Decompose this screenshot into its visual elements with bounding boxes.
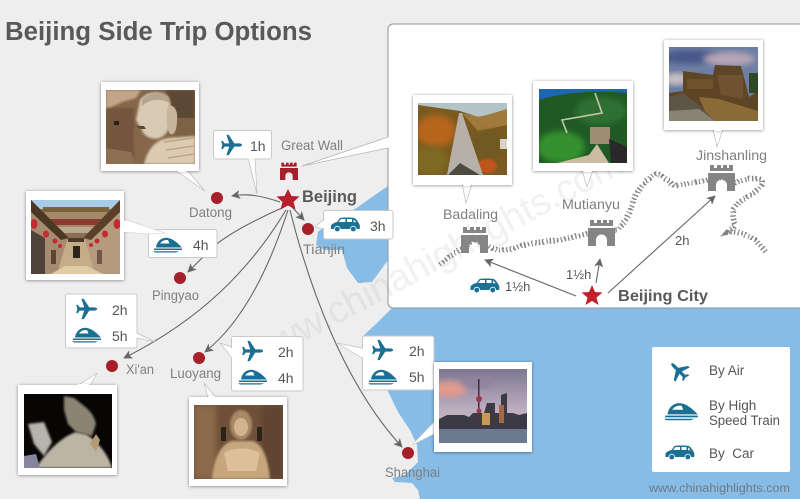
info box: flight to Datong 1h: [214, 130, 272, 194]
panel: Great Wall inset: [388, 24, 800, 308]
time: train: 5h: [409, 369, 425, 385]
label: Tianjin: Tianjin: [303, 242, 345, 257]
label: By High Speed Train: By High: [709, 398, 756, 413]
photo card: Shanghai skyline: [412, 362, 532, 452]
icon: plane: [221, 135, 242, 155]
icon: train: [238, 370, 267, 384]
arrow: city to Mutianyu: [596, 259, 600, 283]
time: train: 5h: [112, 328, 128, 344]
icon: car: [470, 278, 499, 292]
route arrows from Beijing: [124, 195, 402, 447]
icon: train: [153, 238, 182, 252]
arrow: Pingyao: [188, 207, 284, 272]
icon: Badaling tower: [461, 227, 488, 253]
photo card: Datong Yungang Buddha: [101, 82, 205, 191]
arrow: Shanghai: [290, 210, 402, 447]
title: Beijing Side Trip Options: [5, 18, 312, 46]
dot: Datong: [211, 192, 223, 204]
legend: [652, 347, 790, 472]
photo card: Pingyao courtyard: [26, 191, 165, 280]
info box: Luoyang 2h flight, 4h train: [220, 336, 303, 391]
icon: train: [72, 328, 101, 342]
website credit: www.chinahighlights.com: [648, 483, 790, 495]
label: Pingyao: Pingyao: [152, 288, 199, 303]
label: Jinshanling: Jinshanling: [696, 148, 767, 163]
icon: by car: [666, 445, 694, 459]
dot: Pingyao: [174, 272, 186, 284]
callout wedge: Great Wall to panel: [302, 137, 389, 166]
arrow: city to Jinshanling: [608, 196, 715, 293]
label: By Air: By Air: [709, 363, 745, 378]
info box: train to Pingyao 4h: [148, 230, 217, 258]
dot: Luoyang: [193, 352, 205, 364]
icon: Great Wall gate: [280, 163, 298, 180]
icon: train: [368, 370, 397, 384]
icon: Jinshanling tower: [708, 165, 735, 191]
icon: Beijing City star: [582, 285, 602, 305]
dot: Tianjin: [302, 223, 314, 235]
icon: plane: [372, 340, 393, 360]
photo card: Mutianyu: [533, 81, 633, 187]
info box: Shanghai 2h flight, 5h train: [337, 336, 434, 390]
photo card: Luoyang Longmen Buddha: [189, 383, 287, 486]
icon: plane: [76, 299, 97, 319]
marker: Beijing star: [276, 189, 300, 210]
label: Badaling: Badaling: [443, 207, 498, 222]
time: to Mutianyu: 1½h: [566, 267, 591, 282]
arrow: Xi'an: [124, 210, 286, 358]
icon: by train: [664, 403, 698, 420]
icon: plane: [242, 341, 263, 361]
time: flight: 2h: [409, 343, 425, 359]
time: 1h: [250, 138, 266, 154]
label: Beijing: Beijing: [302, 187, 357, 206]
time: flight: 2h: [112, 302, 128, 318]
icon: by air: [664, 356, 693, 385]
dot: Shanghai: [402, 447, 414, 459]
watermark: www.chinahighlights.com: [239, 142, 630, 376]
time: flight: 2h: [278, 344, 294, 360]
arrow: city to Badaling: [485, 260, 576, 296]
time: to Jinshanling: 2h: [675, 233, 689, 248]
icon: Mutianyu tower: [588, 220, 615, 246]
label: Great Wall: Great Wall: [281, 138, 343, 153]
label: Datong: Datong: [189, 205, 232, 220]
info box: car to Tianjin 3h: [315, 210, 393, 239]
label: Mutianyu: Mutianyu: [562, 197, 620, 212]
dot: Xi'an: [106, 360, 118, 372]
arrow: Tianjin: [291, 206, 304, 220]
panel background: [388, 24, 800, 308]
legend box: [652, 347, 790, 472]
photo card: Jinshanling: [661, 40, 763, 147]
photo card: Badaling: [412, 95, 512, 203]
info box: Xi'an 2h flight, 5h train: [66, 294, 155, 348]
wall squiggle: [440, 174, 767, 265]
label: Shanghai: Shanghai: [385, 465, 440, 480]
label: By High Speed Train: Speed Train: [709, 413, 780, 428]
label: Luoyang: Luoyang: [170, 366, 221, 381]
time: train: 4h: [278, 370, 294, 386]
time: 4h: [193, 237, 209, 253]
icon: car: [331, 217, 360, 231]
label: By Car: By Car: [709, 446, 755, 461]
label: Beijing City: Beijing City: [618, 288, 708, 305]
photo card: Xi'an terracotta warrior: [18, 373, 117, 475]
time: 3h: [370, 218, 386, 234]
arrow: Luoyang: [205, 210, 288, 352]
label: Xi'an: Xi'an: [126, 362, 154, 377]
time: car to Badaling: 1½h: [505, 279, 530, 294]
arrow: Datong: [232, 195, 280, 202]
